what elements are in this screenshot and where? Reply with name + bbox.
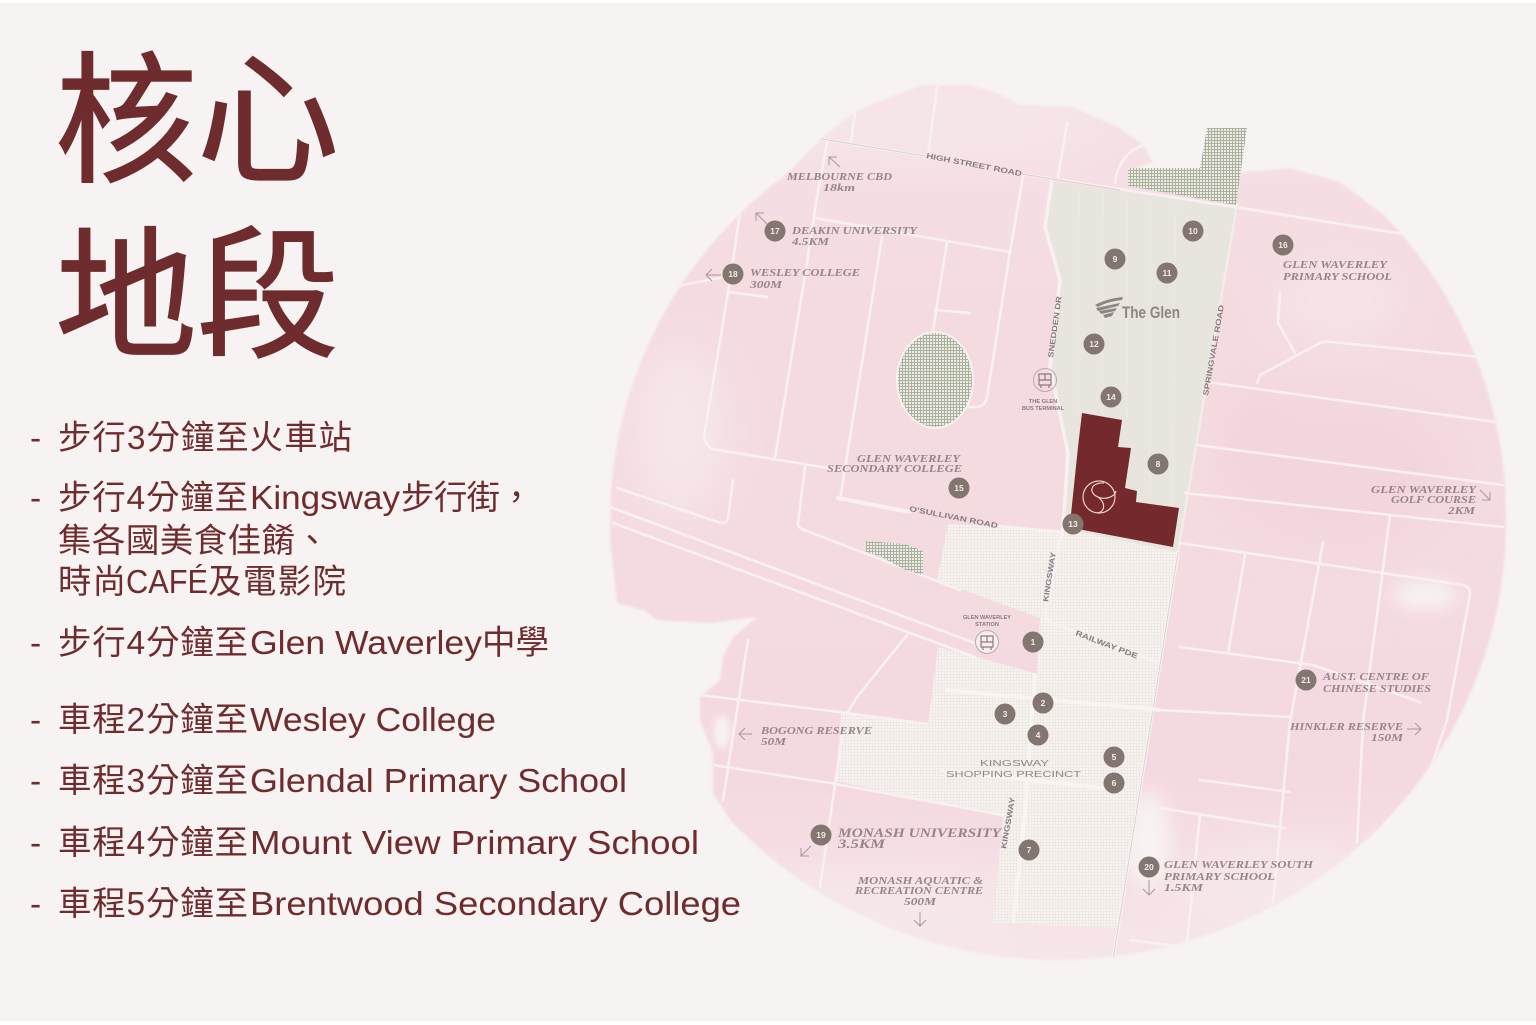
place labels: AUST. CENTRE OF [1322, 672, 1429, 683]
location highlights list: Wesley College [250, 702, 496, 739]
title: 核心 [55, 43, 339, 202]
Kingsway shopping precinct label: SHOPPING PRECINCT [946, 769, 1081, 779]
map: watercolour disc with roads, markers and labels [600, 80, 1520, 970]
icon: bus terminal: BUS TERMINAL [1022, 406, 1065, 412]
development site block [1070, 413, 1179, 547]
location highlights list [30, 420, 741, 923]
place labels: RECREATION CENTRE [854, 886, 983, 897]
numbered markers: 21 [1301, 675, 1311, 685]
numbered markers: 11 [1162, 268, 1172, 278]
road labels: KINGSWAY [999, 797, 1017, 849]
numbered markers: 1 [1031, 637, 1036, 647]
road labels: SNEDDEN DR [1046, 295, 1064, 358]
numbered markers: 8 [1156, 459, 1161, 469]
faint lanes inside The Glen [1078, 190, 1176, 505]
place labels: CHINESE STUDIES [1323, 684, 1431, 695]
place labels: GLEN WAVERLEY [1283, 260, 1389, 271]
direction arrows [706, 157, 1490, 926]
numbered markers [722, 220, 1316, 878]
place labels [749, 172, 1478, 908]
place labels: PRIMARY SCHOOL [1283, 272, 1392, 283]
location highlights list: - [30, 763, 41, 800]
road labels [909, 151, 1226, 849]
numbered markers: 5 [1112, 752, 1117, 762]
location highlights list: - [30, 625, 41, 662]
numbered markers: 10 [1188, 226, 1198, 236]
location highlights list: CAFÉ [126, 564, 208, 601]
road labels: SPRINGVALE ROAD [1201, 303, 1226, 396]
location highlights list: 車程5分鐘至 [58, 886, 248, 923]
Kingsway shopping precinct label: KINGSWAY [980, 758, 1049, 768]
location highlights list: 步行4分鐘至 [58, 625, 248, 662]
location highlights list: - [30, 480, 41, 517]
place labels: 500M [904, 897, 937, 908]
numbered markers: 18 [728, 269, 738, 279]
location highlights list: 步行街， [401, 480, 533, 517]
place labels: PRIMARY SCHOOL [1164, 872, 1275, 883]
place labels: 150M [1371, 733, 1404, 744]
numbered markers: 12 [1089, 339, 1099, 349]
place labels: GLEN WAVERLEY [1371, 485, 1478, 496]
place labels: GLEN WAVERLEY [857, 454, 962, 465]
The Glen logo: The Glen [1122, 303, 1180, 322]
road labels: HIGH STREET ROAD [926, 151, 1023, 178]
icon: bus terminal: THE GLEN [1029, 399, 1057, 405]
place labels: MELBOURNE CBD [786, 172, 892, 183]
location highlights list: - [30, 702, 41, 739]
place labels: 1.5KM [1164, 883, 1204, 894]
park: small green patch [866, 541, 923, 575]
location highlights list: 時尚 [58, 564, 126, 601]
numbered markers: 2 [1041, 698, 1046, 708]
road network [610, 88, 1503, 960]
place labels: 2KM [1447, 506, 1476, 517]
numbered markers: 20 [1144, 862, 1154, 872]
numbered markers: 13 [1068, 519, 1078, 529]
thin grey core of main roads [810, 137, 1178, 960]
place labels: 3.5KM [837, 836, 886, 851]
location highlights list: Kingsway [250, 480, 400, 517]
road labels: KINGSWAY [1041, 552, 1058, 602]
numbered markers: 6 [1112, 778, 1117, 788]
location highlights list: - [30, 825, 41, 862]
site logo [1083, 481, 1116, 513]
location highlights list: 車程4分鐘至 [58, 825, 248, 862]
place labels: 300M [749, 280, 783, 291]
The Glen centre area [1045, 182, 1236, 552]
location highlights list: - [30, 886, 41, 923]
location highlights list: 車程2分鐘至 [58, 702, 248, 739]
location highlights list: Mount View Primary School [250, 825, 699, 862]
location highlights list: - [30, 420, 41, 457]
numbered markers: 17 [770, 226, 780, 236]
location highlights list: Brentwood Secondary College [250, 886, 741, 923]
The Glen logo [1095, 297, 1180, 322]
icon: train station: GLEN WAVERLEY [963, 615, 1011, 621]
numbered markers: 4 [1036, 730, 1041, 740]
place labels: SECONDARY COLLEGE [827, 464, 962, 475]
Kingsway shopping precinct area [836, 524, 1177, 928]
numbered markers: 7 [1027, 845, 1032, 855]
place labels: 4.5KM [791, 237, 830, 248]
title [55, 43, 339, 377]
location highlights list: 步行3分鐘至火車站 [58, 420, 352, 457]
place labels: GOLF COURSE [1391, 495, 1476, 506]
numbered markers: 19 [816, 830, 826, 840]
place labels: MONASH AQUATIC & [857, 876, 984, 887]
title: 地段 [55, 218, 339, 377]
place labels: GLEN WAVERLEY SOUTH [1164, 860, 1314, 871]
location highlights list: 步行4分鐘至 [58, 480, 248, 517]
location highlights list: 集各國美食佳餚、 [58, 523, 329, 560]
place labels: DEAKIN UNIVERSITY [791, 226, 919, 237]
place labels: WESLEY COLLEGE [750, 268, 860, 279]
park: oval sports field [897, 332, 973, 428]
place labels: 18km [823, 183, 855, 194]
numbered markers: 9 [1113, 254, 1118, 264]
location highlights list: Glendal Primary School [250, 763, 627, 800]
location highlights list: 及電影院 [208, 564, 346, 601]
place labels: HINKLER RESERVE [1289, 722, 1403, 733]
location highlights list: 中學 [482, 625, 549, 662]
road labels: RAILWAY PDE [1074, 628, 1139, 661]
faint lanes inside Kingsway precinct [940, 673, 1160, 923]
location highlights list: 車程3分鐘至 [58, 763, 248, 800]
numbered markers: 15 [954, 483, 964, 493]
Kingsway shopping precinct label [946, 758, 1081, 779]
icon: bus terminal [1022, 368, 1065, 412]
location highlights list: Glen Waverley [250, 625, 482, 662]
numbered markers: 3 [1003, 709, 1008, 719]
road labels: O'SULLIVAN ROAD [909, 504, 999, 530]
watercolour wash [600, 80, 1520, 970]
place labels: BOGONG RESERVE [760, 726, 872, 737]
place labels: 50M [761, 737, 787, 748]
icon: train station [963, 615, 1011, 654]
numbered markers: 16 [1278, 240, 1288, 250]
numbered markers: 14 [1106, 392, 1116, 402]
place labels: MONASH UNIVERSITY [837, 825, 1002, 840]
icon: train station: STATION [975, 622, 999, 628]
park: top right green patch [1128, 128, 1247, 205]
